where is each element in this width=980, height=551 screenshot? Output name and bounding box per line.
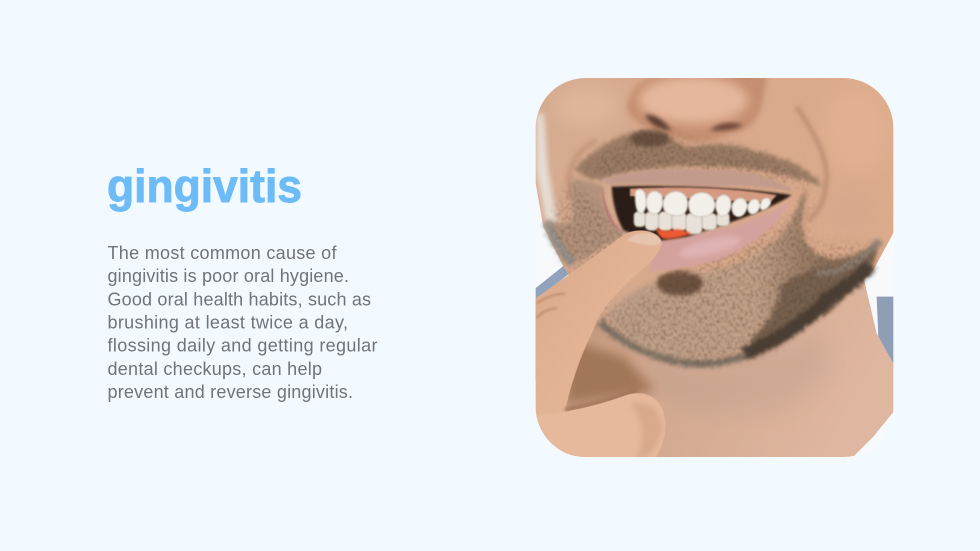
mustache [575, 129, 823, 187]
inner left lip [602, 190, 623, 233]
photo background [530, 70, 900, 465]
finger [533, 230, 662, 420]
stubble speckle [550, 127, 877, 368]
smile creases [569, 107, 827, 220]
neck stubble [676, 345, 821, 406]
fingernail [627, 233, 661, 246]
title: gingivitis [107, 160, 302, 212]
inflamed gum [656, 227, 692, 239]
soul patch [657, 271, 703, 295]
lower lip highlight [680, 235, 740, 258]
gum line [630, 187, 777, 203]
body text: flossing daily and getting regular [108, 336, 378, 356]
thumb shading [632, 402, 662, 457]
body text: gingivitis is poor oral hygiene. [108, 266, 349, 286]
body text: The most common cause of [108, 243, 337, 263]
photo: man lifting lip to show inflamed gum [536, 78, 894, 457]
cheek shading [561, 90, 894, 127]
panel: text column [107, 160, 378, 402]
body text [108, 243, 378, 402]
shirt [533, 266, 895, 367]
left stubble [545, 179, 627, 265]
mouth interior [612, 186, 792, 241]
body text: prevent and reverse gingivitis. [108, 382, 353, 402]
upper teeth [635, 189, 771, 217]
face [536, 78, 894, 324]
dark jaw beard [547, 223, 880, 364]
neck [560, 277, 895, 460]
body text: dental checkups, can help [108, 359, 322, 379]
chin stubble [605, 187, 877, 360]
thumb [533, 393, 665, 462]
lower lip [650, 198, 793, 272]
left face highlight [536, 113, 560, 237]
body text: Good oral health habits, such as [108, 290, 371, 310]
body text: brushing at least twice a day, [108, 312, 348, 332]
knuckle creases [536, 294, 565, 318]
crease shadow above thumb [565, 392, 637, 410]
upper lip [602, 169, 793, 192]
lower teeth [634, 212, 729, 234]
neck shadow [567, 340, 657, 403]
nose [627, 73, 767, 142]
